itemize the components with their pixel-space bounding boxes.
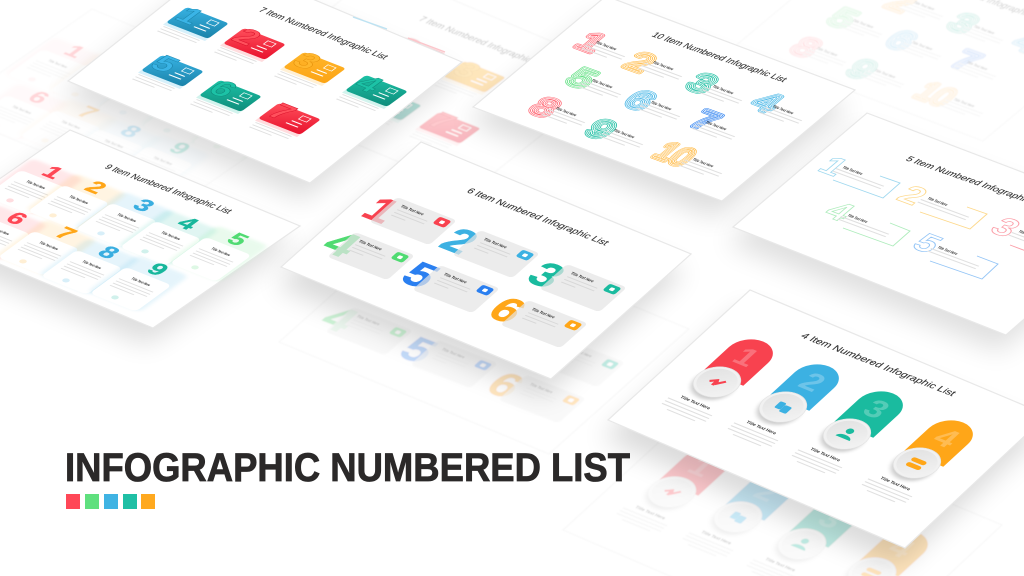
item 4 outline bbox=[816, 196, 910, 246]
item 3 outline bbox=[982, 212, 1024, 260]
item 7: Title Text Here bbox=[704, 121, 728, 131]
item 5 bbox=[558, 63, 626, 100]
shadow: 6 item slide bbox=[275, 160, 685, 397]
pill 3 bbox=[789, 384, 914, 476]
pill 3: 3 bbox=[855, 394, 898, 424]
card 3 orange bbox=[272, 47, 353, 91]
item 4 bbox=[312, 224, 415, 280]
pill 2 bbox=[725, 357, 850, 449]
ghost slide: 7 item reflection bbox=[228, 0, 622, 192]
item 4: 4 bbox=[743, 87, 791, 118]
item 8 bbox=[38, 235, 144, 296]
item 9: 9 bbox=[577, 114, 625, 145]
item 2 bbox=[25, 170, 131, 231]
card 7 red bbox=[248, 98, 328, 142]
panel: 4 item slide bbox=[608, 290, 1024, 548]
item 1: Title Text Here bbox=[25, 180, 47, 190]
card 6 teal bbox=[188, 75, 269, 119]
item 4: Title Text Here bbox=[771, 105, 795, 115]
item 8: 8 bbox=[521, 92, 569, 123]
item 7: Title Text Here bbox=[38, 241, 60, 251]
heading: 6 item: 6 Item Numbered Infographic List bbox=[464, 187, 611, 247]
item 7: 7 bbox=[49, 224, 82, 244]
pill 1: Title Text Here bbox=[678, 395, 712, 411]
item 2: 2 bbox=[616, 47, 664, 78]
item 1: 1 bbox=[352, 190, 410, 231]
item 5: Title Text Here bbox=[210, 247, 232, 257]
item 10: 10 bbox=[645, 137, 704, 172]
item 9 bbox=[87, 252, 193, 313]
item 9: 9 bbox=[577, 114, 625, 145]
item 9: Title Text Here bbox=[130, 277, 152, 287]
ghost slide: 4 item reflection bbox=[563, 400, 1002, 576]
item 8: 8 bbox=[521, 92, 569, 123]
main title: INFOGRAPHIC NUMBERED LIST bbox=[65, 446, 630, 490]
item 6: 6 bbox=[616, 85, 664, 116]
item 4: 4 bbox=[743, 87, 791, 118]
item 8: 8 bbox=[521, 92, 569, 123]
item 6: 6 bbox=[616, 85, 664, 116]
accent line: red bbox=[408, 38, 445, 52]
item 2 bbox=[616, 47, 687, 82]
item 3 bbox=[678, 68, 747, 106]
item 2: 2 bbox=[616, 47, 664, 78]
card 4 teal: 4 bbox=[347, 71, 392, 97]
item 10: 10 bbox=[645, 137, 704, 172]
item 8: 8 bbox=[92, 243, 125, 263]
item 2: Title Text Here bbox=[482, 237, 508, 250]
shadow: 10 item slide bbox=[467, 14, 849, 218]
item 7: 7 bbox=[681, 105, 729, 136]
item 9 bbox=[577, 114, 648, 150]
item 4: 4 bbox=[743, 87, 791, 118]
card 5 blue bbox=[130, 50, 211, 94]
card 1 blue bbox=[156, 2, 236, 46]
shadow: 4 item slide bbox=[602, 308, 1024, 566]
pill 4: Title Text Here bbox=[878, 476, 912, 492]
card 2 red bbox=[212, 23, 293, 67]
item 4 bbox=[743, 87, 807, 126]
item 4 bbox=[117, 206, 223, 267]
ghost slide: 9 item reflection bbox=[0, 9, 322, 207]
item 4: 4 bbox=[312, 224, 371, 265]
item 2 outline: Title Text Here bbox=[926, 197, 949, 207]
shadow: 9 item slide bbox=[0, 146, 294, 345]
pill 4: 4 bbox=[925, 423, 968, 453]
item 2: Title Text Here bbox=[68, 195, 90, 205]
item 3: Title Text Here bbox=[116, 213, 138, 223]
card 6 teal: 6 bbox=[201, 76, 245, 102]
item 1 bbox=[567, 27, 630, 62]
item 5 outline: Title Text Here bbox=[936, 246, 959, 256]
item 5 bbox=[391, 255, 500, 313]
item 5: Title Text Here bbox=[590, 79, 614, 89]
accent line: sky bbox=[353, 17, 387, 29]
item 3: 3 bbox=[678, 68, 726, 99]
item 9: 9 bbox=[577, 114, 625, 145]
panel: 7 item slide bbox=[68, 0, 462, 183]
colour swatches bbox=[66, 494, 155, 509]
item 6 bbox=[0, 201, 52, 262]
item 3: Title Text Here bbox=[711, 85, 735, 95]
item 3 bbox=[73, 188, 179, 249]
item 5: 5 bbox=[558, 63, 606, 94]
item 10: Title Text Here bbox=[691, 158, 715, 168]
item 5 outline bbox=[904, 228, 998, 279]
item 3: Title Text Here bbox=[569, 271, 595, 284]
item 2: 2 bbox=[616, 47, 664, 78]
item 1 outline: Title Text Here bbox=[841, 166, 864, 176]
item 1 bbox=[0, 155, 88, 216]
item 8: 8 bbox=[521, 92, 569, 123]
item 10: 10 bbox=[645, 137, 704, 172]
item 4: Title Text Here bbox=[160, 231, 182, 241]
pill 1: 1 bbox=[725, 342, 768, 372]
panel: 10 item slide bbox=[473, 0, 855, 201]
item 2: 2 bbox=[79, 178, 112, 198]
item 1 outline: 1 bbox=[810, 151, 856, 182]
item 1: 1 bbox=[567, 27, 615, 58]
item 6 bbox=[478, 290, 588, 348]
card 1 blue: 1 bbox=[168, 3, 212, 29]
pill 4 bbox=[859, 413, 984, 505]
item 5: Title Text Here bbox=[442, 272, 468, 285]
item 2 outline bbox=[889, 180, 987, 229]
item 2: 2 bbox=[616, 47, 664, 78]
item 3: 3 bbox=[678, 68, 726, 99]
item 5 bbox=[167, 222, 273, 283]
pill 2: 2 bbox=[791, 367, 834, 397]
item 4 outline: 4 bbox=[816, 196, 862, 227]
item 3: 3 bbox=[127, 196, 160, 216]
card 3 orange: 3 bbox=[285, 48, 329, 74]
heading: 4 item: 4 Item Numbered Infographic List bbox=[798, 332, 958, 398]
item 6 bbox=[616, 85, 685, 122]
card 4 teal bbox=[334, 70, 415, 114]
item 6: 6 bbox=[0, 209, 33, 229]
item 5: 5 bbox=[221, 230, 254, 250]
panel: 6 item slide bbox=[281, 142, 691, 379]
item 1: 1 bbox=[567, 27, 615, 58]
heading: 9 item: 9 Item Numbered Infographic List bbox=[102, 163, 234, 216]
heading: 7 item: 7 Item Numbered Infographic List bbox=[256, 6, 390, 61]
item 7: 7 bbox=[681, 105, 729, 136]
item 6: Title Text Here bbox=[530, 307, 556, 320]
item 6: 6 bbox=[616, 85, 664, 116]
item 1: 1 bbox=[567, 27, 615, 58]
shadow: 5 item slide bbox=[727, 130, 1024, 352]
item 8 bbox=[521, 92, 590, 128]
item 7 bbox=[0, 216, 101, 277]
item 2: 2 bbox=[430, 221, 488, 262]
pill 3: Title Text Here bbox=[808, 447, 842, 463]
item 5: 5 bbox=[558, 63, 606, 94]
item 8: Title Text Here bbox=[81, 260, 103, 270]
ghost slide: 10 item reflection bbox=[734, 0, 1024, 141]
item 1: Title Text Here bbox=[399, 204, 425, 217]
item 6: Title Text Here bbox=[649, 101, 673, 111]
item 9: Title Text Here bbox=[612, 129, 636, 139]
item 3: 3 bbox=[517, 255, 575, 296]
pill 2: Title Text Here bbox=[744, 420, 778, 436]
item 3: 3 bbox=[678, 68, 726, 99]
item 8: Title Text Here bbox=[554, 107, 578, 117]
item 4: 4 bbox=[743, 87, 791, 118]
item 6: 6 bbox=[616, 85, 664, 116]
item 2 outline: 2 bbox=[889, 180, 935, 211]
item 10: 10 bbox=[645, 137, 704, 172]
item 5 outline: 5 bbox=[904, 228, 950, 259]
item 5: 5 bbox=[558, 63, 606, 94]
item 7 bbox=[681, 105, 740, 142]
item 1: Title Text Here bbox=[594, 41, 618, 51]
pill 1 bbox=[659, 332, 784, 424]
item 9: 9 bbox=[141, 260, 174, 280]
heading: 10 item: 10 Item Numbered Infographic List bbox=[649, 31, 789, 84]
item 7: 7 bbox=[681, 105, 729, 136]
item 4: 4 bbox=[171, 214, 205, 234]
card 2 red: 2 bbox=[225, 24, 269, 50]
item 5: 5 bbox=[558, 63, 606, 94]
item 2 bbox=[430, 221, 540, 278]
shadow: 7 item slide bbox=[62, 0, 456, 200]
item 7: 7 bbox=[681, 105, 729, 136]
panel: 5 item slide bbox=[733, 113, 1024, 335]
item 5: 5 bbox=[391, 255, 449, 296]
item 2: Title Text Here bbox=[651, 61, 675, 71]
item 6: 6 bbox=[478, 290, 536, 331]
item 4: Title Text Here bbox=[357, 239, 383, 252]
item 3 bbox=[517, 255, 627, 312]
item 9: 9 bbox=[577, 114, 625, 145]
item 1: 1 bbox=[36, 163, 69, 183]
item 1 outline bbox=[810, 151, 900, 198]
item 4 outline: Title Text Here bbox=[846, 214, 869, 224]
item 1: 1 bbox=[567, 27, 615, 58]
card 7 red: 7 bbox=[260, 99, 304, 125]
item 3: 3 bbox=[678, 68, 726, 99]
card 5 blue: 5 bbox=[143, 51, 187, 77]
item 1 bbox=[352, 190, 457, 245]
ghost slide: 6 item reflection bbox=[279, 217, 689, 454]
panel: 9 item slide bbox=[0, 130, 300, 328]
